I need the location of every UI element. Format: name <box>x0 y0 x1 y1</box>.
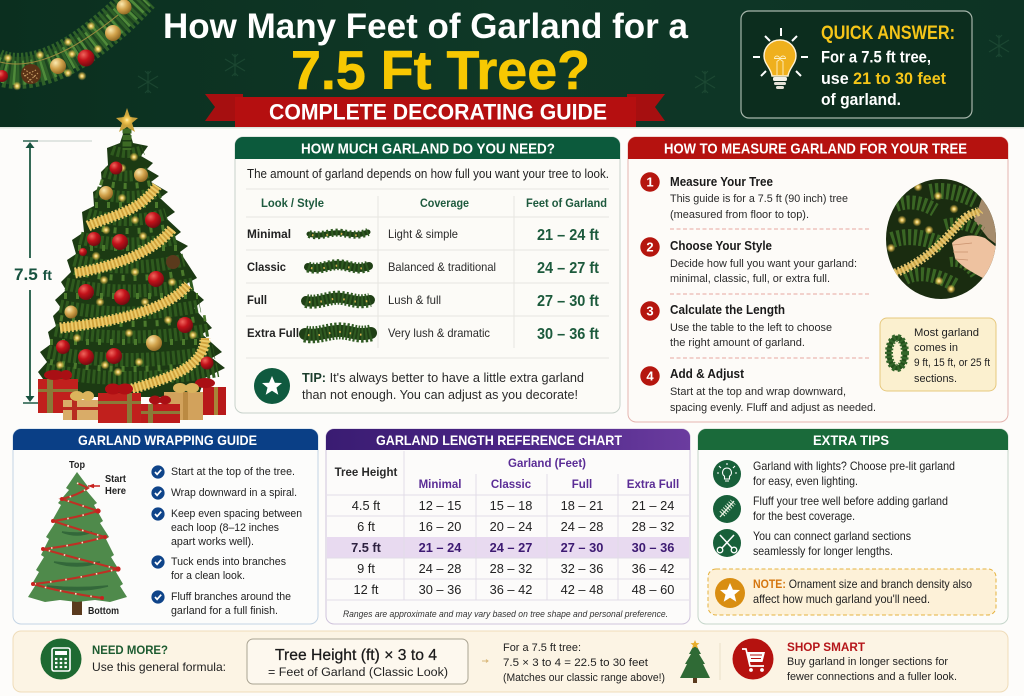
row: full: 27 – 30 ft <box>537 293 599 310</box>
table rows: 30 – 36 <box>419 582 461 597</box>
row: classic: Classic <box>247 260 286 274</box>
row: minimal: Minimal <box>247 227 291 241</box>
row: minimal: Light & simple <box>388 227 458 241</box>
table rows: 48 – 60 <box>632 582 674 597</box>
table rows: 42 – 48 <box>561 582 603 597</box>
formula intro <box>92 643 226 674</box>
checklist: Start at the top of the tree. <box>171 466 295 478</box>
tip: pre-lit: Garland with lights? Choose pre-lit garland <box>753 460 955 473</box>
garland decoration <box>0 0 142 90</box>
table header: Look / Style <box>261 196 324 210</box>
panel heading: HOW TO MEASURE GARLAND FOR YOUR TREE <box>664 140 967 158</box>
panel: extra tips <box>698 429 1008 624</box>
step 4: Add & Adjust <box>670 367 745 381</box>
step 3 <box>640 301 832 349</box>
shop smart: SHOP SMART <box>787 640 865 654</box>
row: extra full <box>247 326 599 343</box>
tree <box>38 108 226 423</box>
table rows: 24 – 28 <box>419 561 461 576</box>
table rows: 6 ft <box>357 519 375 534</box>
panel heading: HOW MUCH GARLAND DO YOU NEED? <box>301 140 555 158</box>
panel heading: EXTRA TIPS <box>813 432 889 448</box>
reference table: Classic <box>491 479 532 491</box>
panel: garland wrapping guide <box>13 429 318 624</box>
tip: pre-lit: for easy, even lighting. <box>753 475 858 488</box>
tip <box>254 368 584 404</box>
step 1 <box>640 172 848 221</box>
panel heading: GARLAND LENGTH REFERENCE CHART <box>376 432 622 448</box>
step 3: the right amount of garland. <box>670 337 805 349</box>
table rows: 36 – 42 <box>490 582 532 597</box>
table rows: 36 – 42 <box>632 561 674 576</box>
formula box <box>247 639 468 684</box>
table header: Feet of Garland <box>526 196 607 210</box>
step 2: minimal, classic, full, or extra full. <box>670 273 830 285</box>
tip: fluff <box>713 495 948 523</box>
table rows: 24 – 27 <box>490 540 532 555</box>
checklist: Keep even spacing between <box>171 508 302 520</box>
step 4: spacing evenly. Fluff and adjust as needed. <box>670 402 876 414</box>
quick answer box <box>741 11 972 118</box>
ornaments <box>56 162 214 370</box>
step 4: 4 <box>646 369 654 384</box>
diagram labels: Top <box>69 459 85 471</box>
icon: small tree <box>680 640 710 683</box>
table rows: 15 – 18 <box>490 498 532 513</box>
quick answer text: of garland. <box>821 91 901 109</box>
step 1: Measure Your Tree <box>670 175 773 189</box>
callout: garland sections: sections. <box>914 373 957 385</box>
worked example: (Matches our classic range above!) <box>503 672 665 684</box>
panel: how much garland do you need <box>235 137 620 413</box>
reference table <box>327 451 689 600</box>
lights <box>56 152 198 376</box>
checklist: for a clean look. <box>171 570 245 582</box>
tip: than not enough. You can adjust as you decorate! <box>302 387 578 402</box>
title line 1: How Many Feet of Garland for a <box>163 7 689 46</box>
reference table: Minimal <box>419 479 461 491</box>
diagram labels: Start <box>105 473 126 485</box>
reference table: Tree Height <box>335 467 397 479</box>
panel: how to measure garland <box>628 137 1008 422</box>
start arrow <box>88 484 100 488</box>
quick answer text: QUICK ANSWER: <box>821 23 955 44</box>
panel heading <box>13 429 318 450</box>
garland spiral <box>33 483 118 598</box>
table rows: 32 – 36 <box>561 561 603 576</box>
tree top star <box>116 108 138 132</box>
title line 2: 7.5 Ft Tree? <box>291 39 590 101</box>
step 4: Start at the top and wrap downward, <box>670 386 846 398</box>
row: classic <box>247 260 599 277</box>
step 1: (measured from floor to top). <box>670 209 809 221</box>
quick answer text <box>821 23 955 109</box>
step 2: Decide how full you want your garland: <box>670 258 857 270</box>
table rows: 12 ft <box>354 582 379 597</box>
row: minimal: 21 – 24 ft <box>537 227 599 244</box>
table rows: 28 – 32 <box>490 561 532 576</box>
checklist: Wrap downward in a spiral. <box>171 487 297 499</box>
gifts <box>38 370 226 423</box>
row: extra full: 30 – 36 ft <box>537 326 599 343</box>
callout: garland sections: comes in <box>914 342 958 354</box>
panel heading <box>326 429 690 450</box>
tip: TIP: It's always better to have a little extra garland <box>302 370 584 385</box>
table rows: 9 ft <box>357 561 375 576</box>
formula box: = Feet of Garland (Classic Look) <box>268 665 448 679</box>
icon: shopping cart <box>732 638 774 680</box>
table header <box>261 196 607 210</box>
checklist: Fluff branches around the <box>171 591 291 603</box>
formula intro: NEED MORE? <box>92 643 168 657</box>
tip: pre-lit <box>713 460 955 488</box>
row: extra full: Extra Full <box>247 326 299 340</box>
table rows: 12 – 15 <box>419 498 461 513</box>
checklist: apart works well). <box>171 536 254 548</box>
table rows: 20 – 24 <box>490 519 532 534</box>
callout: garland sections: 9 ft, 15 ft, or 25 ft <box>914 357 990 369</box>
panel: formula footer <box>13 631 1008 692</box>
row: classic: 24 – 27 ft <box>537 260 599 277</box>
icon: calculator <box>40 638 82 680</box>
row: full: Lush & full <box>388 293 441 307</box>
quick answer text: For a 7.5 ft tree, <box>821 48 931 66</box>
note callout <box>708 569 996 615</box>
checklist: each loop (8–12 inches <box>171 522 279 534</box>
reference table: Garland (Feet) <box>508 458 586 470</box>
panel heading <box>235 137 620 159</box>
table rows: 27 – 30 <box>561 540 603 555</box>
garland table <box>247 196 607 343</box>
quick answer text: use 21 to 30 feet <box>821 70 946 88</box>
table rows: 4.5 ft <box>352 498 381 513</box>
row: full <box>247 293 599 310</box>
step 2: Choose Your Style <box>670 239 772 253</box>
panel heading: GARLAND WRAPPING GUIDE <box>78 432 257 448</box>
diagram labels: Here <box>105 485 126 497</box>
step 2 <box>640 237 857 285</box>
gold tinsel garland <box>60 186 205 389</box>
formula intro: Use this general formula: <box>92 661 226 674</box>
tip: connect: seamlessly for longer lengths. <box>753 545 893 558</box>
step 3: Use the table to the left to choose <box>670 322 832 334</box>
arrow <box>482 660 488 662</box>
row: extra full: Very lush & dramatic <box>388 326 490 340</box>
table rows: 16 – 20 <box>419 519 461 534</box>
checklist: garland for a full finish. <box>171 605 278 617</box>
height measure arrow <box>14 141 92 403</box>
tip: connect: You can connect garland sections <box>753 530 911 543</box>
table rows <box>351 498 674 597</box>
tip: fluff: Fluff your tree well before adding garland <box>753 495 948 508</box>
shop smart: Buy garland in longer sections for <box>787 656 948 668</box>
callout: garland sections <box>880 318 996 391</box>
height measure arrow: 7.5 ft <box>14 265 52 284</box>
subtitle ribbon <box>205 94 665 127</box>
worked example <box>503 642 665 684</box>
worked example: For a 7.5 ft tree: <box>503 642 581 654</box>
checklist: Tuck ends into branches <box>171 556 286 568</box>
icon: light bulb <box>753 28 808 89</box>
row: minimal <box>247 227 599 244</box>
worked example: 7.5 × 3 to 4 = 22.5 to 30 feet <box>503 657 649 669</box>
diagram labels: Bottom <box>88 605 119 617</box>
step 3: 3 <box>646 304 654 319</box>
table rows: 21 – 24 <box>632 498 674 513</box>
reference table: Extra Full <box>627 479 679 491</box>
note callout: NOTE: Ornament size and branch density also <box>753 578 972 591</box>
intro text: The amount of garland depends on how full you want your tree to look. <box>247 167 609 181</box>
row: full: Full <box>247 293 267 307</box>
step 1: This guide is for a 7.5 ft (90 inch) tree <box>670 193 848 205</box>
chart footnote: Ranges are approximate and may vary based on tree shape and personal preference. <box>343 609 668 620</box>
table rows: 30 – 36 <box>632 540 674 555</box>
icon: wreath <box>889 338 905 368</box>
table rows: 21 – 24 <box>419 540 462 555</box>
reference table: Full <box>572 479 592 491</box>
table rows: 24 – 28 <box>561 519 603 534</box>
callout: garland sections: Most garland <box>914 327 979 339</box>
diagram labels <box>69 459 126 617</box>
tip: fluff: for the best coverage. <box>753 510 855 523</box>
step 1: 1 <box>646 175 654 190</box>
panel heading <box>698 429 1008 450</box>
shop smart <box>787 640 957 683</box>
shop smart: fewer connections and a fuller look. <box>787 671 957 683</box>
step 4 <box>640 366 876 414</box>
wrapping diagram tree <box>28 472 127 615</box>
formula box: Tree Height (ft) × 3 to 4 <box>275 647 437 664</box>
checklist <box>151 465 302 617</box>
header banner <box>0 0 1024 128</box>
panel: garland length reference chart <box>326 429 690 624</box>
step 2: 2 <box>646 240 654 255</box>
table rows: 18 – 21 <box>561 498 603 513</box>
panel heading <box>628 137 1008 159</box>
subtitle ribbon: COMPLETE DECORATING GUIDE <box>269 100 607 124</box>
note callout: affect how much garland you'll need. <box>753 593 930 606</box>
table rows: 7.5 ft <box>351 540 382 555</box>
step 3: Calculate the Length <box>670 303 785 317</box>
photo: hand holding tinsel garland <box>886 179 1000 299</box>
table rows: 28 – 32 <box>632 519 674 534</box>
table header: Coverage <box>420 196 469 210</box>
tip: connect <box>713 529 911 558</box>
row: classic: Balanced & traditional <box>388 260 496 274</box>
